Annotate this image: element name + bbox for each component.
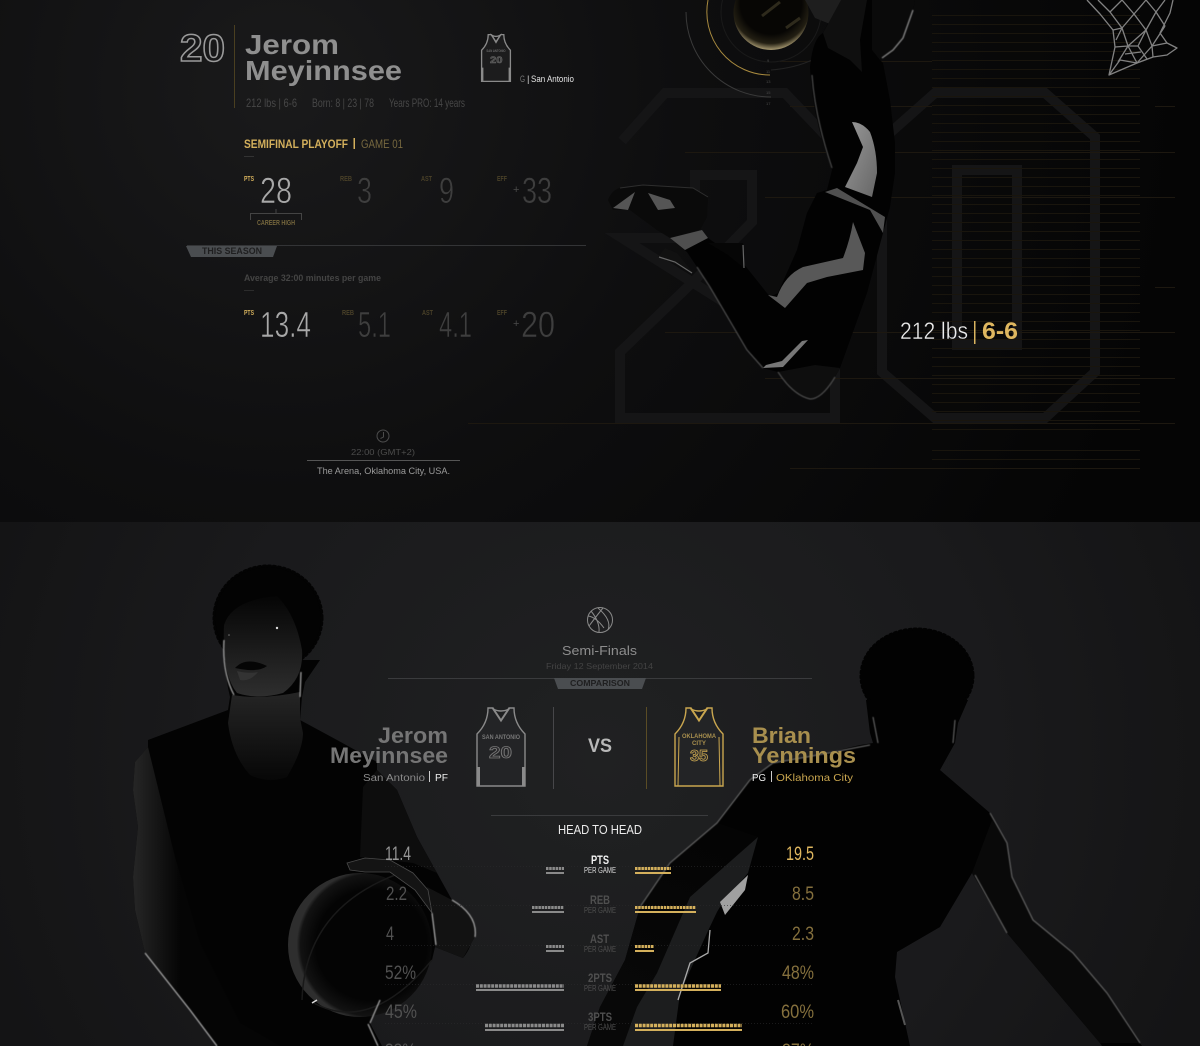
ring tick labels: 13 bbox=[766, 79, 771, 84]
icon: basketball held by dunking player bbox=[734, 0, 808, 50]
head to head row: PTS: 11.4 bbox=[385, 844, 411, 865]
shorts stripe bbox=[768, 222, 865, 308]
player position and team: | bbox=[527, 74, 529, 85]
stats: this season: AST bbox=[422, 310, 434, 317]
left player name and team: San Antonio bbox=[363, 772, 425, 784]
left player name and team: Meyinnsee bbox=[330, 743, 448, 768]
head to head row: cut-off next values bbox=[385, 1041, 814, 1046]
heading: semi-finals and date: Friday 12 September 2014 bbox=[546, 661, 653, 671]
stats: semifinal game: 3 bbox=[357, 170, 372, 211]
ring tick labels: 11 bbox=[766, 69, 771, 74]
heading: jersey number 20: 20 bbox=[180, 28, 225, 70]
player photo: dunking silhouette bbox=[608, 0, 915, 399]
icon: small jersey San Antonio: 20 bbox=[490, 55, 503, 66]
ring tick labels: 17 bbox=[766, 101, 771, 106]
section tab: comparison: COMPARISON bbox=[570, 678, 630, 688]
torso bbox=[133, 660, 473, 1046]
stats: semifinal game: PTS bbox=[244, 176, 254, 183]
left player name and team: Jerom bbox=[378, 723, 448, 748]
ring tick labels: 15 bbox=[766, 90, 771, 95]
icon: Oklahoma City jersey: OKLAHOMA bbox=[682, 734, 717, 740]
panel: top player profile background bbox=[0, 0, 1200, 522]
stats: this season: REB bbox=[342, 310, 354, 317]
divider left of vs bbox=[553, 707, 554, 789]
text: weight and height callout bbox=[900, 318, 1018, 345]
right player name and team: OKlahoma City bbox=[776, 772, 854, 784]
icon: clock bbox=[377, 430, 389, 442]
shorts waistband bbox=[825, 188, 885, 233]
callout: career high bbox=[250, 209, 302, 227]
text: game time and venue bbox=[307, 448, 460, 476]
head to head row: AST: 2.3 bbox=[792, 924, 814, 945]
head to head row: REB: 2.2 bbox=[386, 884, 407, 905]
divider bbox=[234, 25, 235, 108]
text: game time and venue: 22:00 (GMT+2) bbox=[351, 448, 415, 457]
player bio line: Born: 8 | 23 | 78 bbox=[312, 96, 374, 110]
stats: semifinal game bbox=[244, 170, 552, 211]
head to head row: 3PTS: 45% bbox=[385, 1002, 417, 1023]
rim lights bbox=[145, 640, 475, 1046]
hand on ball bbox=[347, 858, 432, 913]
right player name and team: Yennings bbox=[752, 743, 856, 768]
stats: this season: 20 bbox=[521, 304, 555, 345]
stats: semifinal game: AST bbox=[421, 176, 433, 183]
shoe bbox=[608, 185, 708, 238]
head to head row: REB: 8.5 bbox=[792, 884, 814, 905]
head to head row: REB bbox=[386, 884, 814, 915]
stats: semifinal game: 9 bbox=[439, 170, 454, 211]
head to head row: AST: PER GAME bbox=[584, 945, 616, 954]
head to head row: 2PTS: 48% bbox=[782, 963, 814, 984]
stats: this season: EFF bbox=[497, 310, 508, 317]
jersey side panel bbox=[845, 122, 877, 197]
eyes bbox=[276, 627, 278, 629]
icon: small jersey San Antonio bbox=[482, 35, 510, 81]
torso and arms bbox=[587, 700, 1142, 1046]
jersey flash bbox=[720, 875, 748, 915]
icon: Oklahoma City jersey: CITY bbox=[692, 741, 706, 747]
head to head row: 3PTS: 3PTS bbox=[588, 1012, 612, 1024]
mouth bbox=[235, 661, 267, 670]
icon: small jersey San Antonio: SAN ANTONIO bbox=[486, 49, 506, 53]
icon: Oklahoma City jersey bbox=[675, 708, 723, 786]
heading: player name bbox=[245, 29, 402, 86]
knee highlight bbox=[763, 340, 808, 368]
gap between arm and torso bbox=[623, 837, 758, 1046]
hair bbox=[861, 629, 973, 723]
ring tick labels bbox=[766, 58, 771, 106]
stats: this season: PTS bbox=[244, 310, 254, 317]
text: vs: VS bbox=[588, 736, 612, 757]
neck bbox=[228, 692, 303, 780]
head to head row: REB: PER GAME bbox=[584, 906, 616, 915]
head to head row: PTS: PER GAME bbox=[584, 866, 616, 875]
head to head row: PTS: 19.5 bbox=[786, 844, 814, 865]
left player name and team bbox=[330, 723, 448, 784]
stats: this season: 4.1 bbox=[439, 304, 472, 345]
sock bbox=[670, 230, 708, 250]
text: game time and venue: The Arena, Oklahoma City, USA. bbox=[317, 466, 450, 476]
right player name and team: PG bbox=[752, 772, 766, 784]
head to head row: 2PTS bbox=[385, 963, 814, 993]
head to head row: AST bbox=[386, 924, 814, 954]
head to head row: 2PTS: 52% bbox=[385, 963, 416, 984]
stats: semifinal game: 33 bbox=[522, 170, 552, 211]
head to head row: PTS: PTS bbox=[591, 855, 609, 867]
icon: basketball net bbox=[1087, 0, 1177, 75]
left arm bbox=[133, 747, 280, 1046]
left player name and team: PF bbox=[435, 772, 448, 784]
stats: this season: 5.1 bbox=[358, 304, 391, 345]
head to head row: PTS bbox=[385, 844, 814, 875]
head to head row: AST: AST bbox=[590, 934, 609, 946]
section tab: this season bbox=[186, 245, 586, 257]
ring tick labels: 9 bbox=[767, 58, 770, 63]
head to head row: 3PTS bbox=[385, 1002, 814, 1032]
upper arm bbox=[823, 0, 867, 72]
heading: semifinal playoff game: GAME 01 bbox=[361, 137, 403, 151]
callout: career high: CAREER HIGH bbox=[257, 220, 295, 227]
text: weight and height callout: 212 lbs bbox=[900, 318, 968, 345]
raised forearm on ball bbox=[805, 0, 842, 24]
icon: San Antonio jersey bbox=[477, 708, 525, 786]
shorts flash bbox=[678, 930, 710, 1000]
heading: player name: Jerom bbox=[245, 29, 339, 60]
rim lights bbox=[697, 75, 835, 399]
heading: player name: Meyinnsee bbox=[245, 55, 402, 86]
head to head row: 3PTS: 60% bbox=[781, 1002, 814, 1023]
player position and team: G bbox=[520, 74, 525, 85]
stats: semifinal game: REB bbox=[340, 176, 352, 183]
face bbox=[872, 0, 915, 60]
stats: this season: + bbox=[513, 318, 519, 330]
stats: semifinal game: + bbox=[513, 184, 519, 196]
player position and team bbox=[520, 74, 574, 85]
icon: basketball bbox=[588, 608, 612, 632]
text: average minutes: Average 32:00 minutes per game bbox=[244, 273, 381, 284]
head to head row: 2PTS: 2PTS bbox=[588, 973, 612, 985]
player bio line: 212 lbs | 6-6 bbox=[246, 96, 297, 110]
player photo: left silhouette with ball bbox=[133, 566, 475, 1046]
basketball bbox=[288, 873, 432, 1017]
background stripes bbox=[468, 16, 1175, 468]
heading: semifinal playoff game: SEMIFINAL PLAYOFF bbox=[244, 137, 348, 151]
back shoe bbox=[658, 248, 693, 273]
section tab: comparison bbox=[388, 678, 812, 689]
heading: semi-finals and date bbox=[546, 643, 653, 671]
head to head row: AST: 4 bbox=[386, 924, 394, 945]
panel: comparison background bbox=[0, 522, 1200, 1046]
row separators bbox=[385, 866, 814, 1024]
icon: San Antonio jersey: 20 bbox=[489, 743, 512, 762]
right player name and team: Brian bbox=[752, 723, 811, 748]
icon: ball target rings bbox=[686, 0, 821, 97]
stats: this season bbox=[244, 304, 555, 345]
player position and team: San Antonio bbox=[531, 74, 574, 85]
text: weight and height callout: 6-6 bbox=[982, 318, 1018, 345]
right upper arm bbox=[360, 770, 437, 873]
right player name and team bbox=[752, 723, 856, 784]
forearm bbox=[587, 823, 758, 1046]
player photo: right silhouette bbox=[587, 629, 1142, 1046]
section tab: this season: THIS SEASON bbox=[202, 246, 262, 256]
head to head row: REB: REB bbox=[590, 895, 610, 907]
heading: semifinal playoff game bbox=[244, 137, 403, 157]
head to head row: 2PTS: PER GAME bbox=[584, 984, 616, 993]
heading: head to head: HEAD TO HEAD bbox=[558, 822, 642, 837]
player bio line: Years PRO: 14 years bbox=[389, 96, 465, 110]
stats: semifinal game: 28 bbox=[260, 170, 292, 211]
icon: Oklahoma City jersey: 35 bbox=[690, 748, 708, 765]
wrist bbox=[427, 887, 475, 958]
player bio line bbox=[246, 96, 465, 110]
background number 20 outline bbox=[620, 93, 1095, 418]
stats: semifinal game: EFF bbox=[497, 176, 508, 183]
right arm bbox=[972, 820, 1138, 1043]
text: average minutes bbox=[244, 273, 381, 291]
divider right of vs bbox=[646, 707, 647, 789]
rim lights bbox=[640, 717, 1140, 1043]
icon: San Antonio jersey: SAN ANTONIO bbox=[482, 735, 520, 741]
stats: this season: 13.4 bbox=[260, 304, 311, 345]
head to head row: 3PTS: PER GAME bbox=[584, 1023, 616, 1032]
hair bbox=[214, 566, 322, 670]
face bbox=[224, 596, 302, 696]
heading: semi-finals and date: Semi-Finals bbox=[562, 643, 638, 658]
